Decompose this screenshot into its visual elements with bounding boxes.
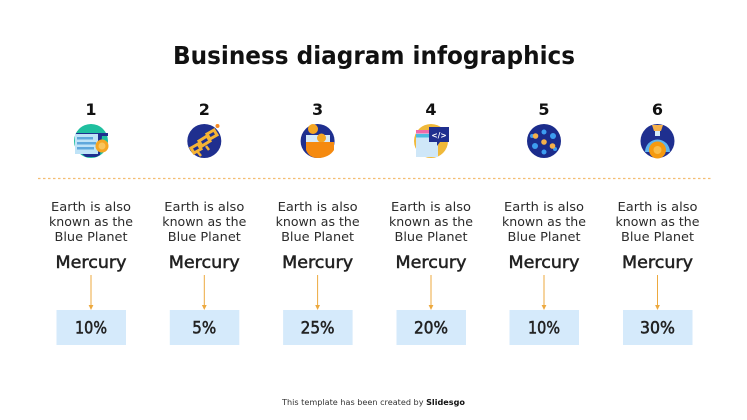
description 4: known as the <box>389 214 473 229</box>
description 6 <box>616 199 700 244</box>
icon: network chain <box>187 124 221 158</box>
icon: code speech bubble: </> <box>431 131 447 140</box>
icon: real estate listing <box>74 124 108 158</box>
arrow 2 <box>202 275 207 310</box>
description 3: Blue Planet <box>281 229 354 244</box>
value box 1 <box>56 310 126 345</box>
number 4: 4 <box>425 100 437 119</box>
description 2: known as the <box>162 214 246 229</box>
column 3 <box>276 100 360 345</box>
value box 2: 5% <box>192 318 216 338</box>
arrow 6 <box>655 275 660 310</box>
description 6: Earth is also <box>618 199 698 214</box>
value box 3 <box>283 310 353 345</box>
value box 3: 25% <box>301 318 335 338</box>
number 1: 1 <box>85 100 97 119</box>
value box 5: 10% <box>528 318 560 338</box>
description 5 <box>502 199 586 244</box>
description 1 <box>49 199 133 244</box>
column 2 <box>162 100 246 345</box>
value box 4: 20% <box>414 318 448 338</box>
column 1 <box>49 100 133 345</box>
number 5: 5 <box>538 100 550 119</box>
value box 6 <box>623 310 692 345</box>
arrow 1 <box>89 275 93 310</box>
column 6 <box>616 100 700 345</box>
description 2 <box>162 199 246 244</box>
number 2: 2 <box>199 100 210 119</box>
title: Business diagram infographics <box>173 41 575 70</box>
description 1: known as the <box>49 214 133 229</box>
label 2: Mercury <box>169 253 240 273</box>
label 4: Mercury <box>396 253 466 273</box>
description 6: Blue Planet <box>621 229 694 244</box>
value box 5 <box>510 310 579 345</box>
description 2: Earth is also <box>164 199 244 214</box>
arrow 4 <box>429 275 433 310</box>
description 4: Blue Planet <box>394 229 468 244</box>
icon: dot network <box>527 124 561 158</box>
label 1: Mercury <box>56 253 126 273</box>
value box 2 <box>170 310 239 345</box>
description 3: known as the <box>276 214 360 229</box>
icon: code speech bubble <box>414 124 449 158</box>
description 5: Earth is also <box>504 199 584 214</box>
icon: coin in hand <box>640 124 674 158</box>
description 6: known as the <box>616 214 700 229</box>
description 4: Earth is also <box>391 199 471 214</box>
description 4 <box>389 199 473 244</box>
footer credit: This template has been created by Slidesgo <box>281 398 465 407</box>
description 3 <box>276 199 360 244</box>
description 5: Blue Planet <box>508 229 581 244</box>
value box 1: 10% <box>75 318 107 338</box>
column 5 <box>502 100 586 345</box>
description 1: Earth is also <box>51 199 131 214</box>
description 1: Blue Planet <box>54 229 128 244</box>
number 3: 3 <box>312 100 323 119</box>
value box 4 <box>396 310 466 345</box>
column 4 <box>389 100 473 345</box>
icon: folder with coins <box>301 124 335 158</box>
description 2: Blue Planet <box>168 229 241 244</box>
label 3: Mercury <box>282 253 353 273</box>
description 3: Earth is also <box>278 199 358 214</box>
value box 6: 30% <box>640 318 675 338</box>
number 6: 6 <box>652 100 663 119</box>
arrow 5 <box>542 275 546 310</box>
label 6: Mercury <box>622 253 693 273</box>
arrow 3 <box>315 275 320 310</box>
label 5: Mercury <box>508 253 580 273</box>
description 5: known as the <box>502 214 586 229</box>
